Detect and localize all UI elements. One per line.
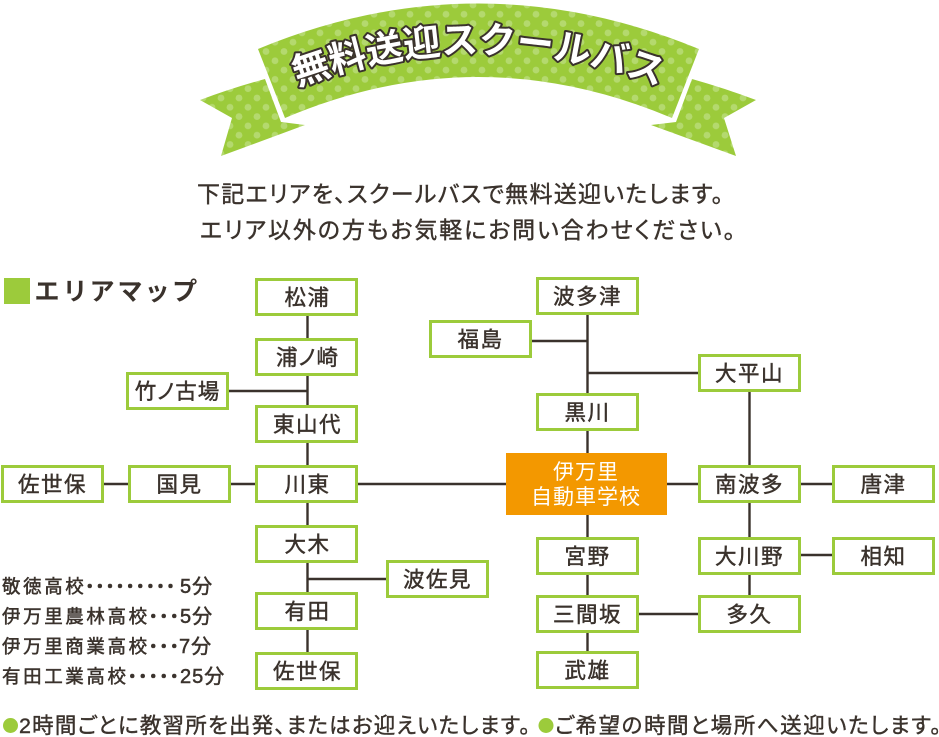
time: 有田工業高校: [2, 665, 225, 688]
station: 大川野: [700, 538, 800, 574]
station: 唐津: [834, 466, 934, 502]
time: 有田工業高校: 有田工業高校: [2, 666, 129, 687]
ribbon banner title: [200, 4, 756, 156]
station: 波多津: 波多津: [553, 285, 622, 309]
station: 武雄: 武雄: [564, 659, 611, 683]
driving school hub: 自動車学校: [531, 486, 641, 509]
time: 敬徳高校: 敬徳高校: [2, 576, 86, 597]
station: 多久: 多久: [726, 603, 773, 627]
ribbon right tail: [651, 79, 756, 156]
ribbon left tail: [200, 79, 305, 156]
station: 竹ノ古場: 竹ノ古場: [135, 380, 220, 404]
station: 相知: 相知: [860, 545, 907, 569]
station: 唐津: 唐津: [860, 473, 907, 497]
driving school hub: 伊万里: [553, 461, 619, 484]
station: 波多津: [538, 278, 638, 314]
intro text: 下記エリアを、スクールバスで無料送迎いたします。: [197, 181, 723, 207]
station: 武雄: [538, 652, 638, 688]
station: 東山代: [256, 406, 356, 442]
station: 川東: [256, 466, 356, 502]
time: 敬徳高校: [2, 575, 213, 598]
route connector lines: [104, 315, 832, 652]
bottom notes: [3, 714, 939, 737]
station: 三間坂: 三間坂: [553, 603, 622, 627]
time: 伊万里農林高校: 5分: [180, 605, 213, 628]
station: 松浦: [256, 280, 356, 314]
left route stations: [2, 280, 488, 688]
station: 宮野: 宮野: [564, 545, 611, 569]
station: 佐世保 south: [256, 654, 356, 688]
station: 有田: [256, 594, 356, 628]
station: 佐世保 west: [2, 466, 102, 502]
station: 波佐見: [388, 562, 488, 596]
station: 多久: [700, 596, 800, 632]
station: 国見: [130, 466, 230, 502]
station: 佐世保 west: 佐世保: [18, 473, 87, 497]
travel times to high schools: [2, 575, 225, 688]
banner heading: 無料送迎スクールバス: [289, 20, 664, 90]
station: 黒川: [538, 394, 638, 430]
section heading: area map: エリアマップ: [35, 278, 197, 306]
station: 相知: [834, 538, 934, 574]
station: 南波多: 南波多: [715, 473, 784, 497]
time: 伊万里商業高校: ・・・: [144, 636, 184, 657]
intro text: [197, 181, 735, 243]
station: 大木: 大木: [284, 533, 331, 557]
station: 国見: 国見: [156, 473, 203, 497]
ribbon main band: [258, 4, 699, 118]
time: 伊万里農林高校: 伊万里農林高校: [2, 606, 150, 627]
time: 有田工業高校: ・・・・・: [123, 666, 184, 687]
station: 川東: 川東: [284, 473, 331, 497]
station: 三間坂: [538, 596, 638, 632]
station: 浦ノ崎: [256, 340, 356, 374]
station: 有田: 有田: [284, 600, 331, 624]
station: 黒川: 黒川: [564, 401, 611, 425]
station: 福島: [430, 322, 530, 356]
station: 大木: [256, 526, 356, 562]
time: 敬徳高校: 5分: [180, 575, 213, 598]
station: 大平山: [700, 356, 800, 390]
time: 伊万里農林高校: [2, 605, 213, 628]
time: 有田工業高校: 25分: [180, 665, 225, 688]
intro text: エリア以外の方もお気軽にお問い合わせください。: [200, 217, 735, 243]
station: 竹ノ古場: [128, 374, 228, 408]
station: 佐世保 south: 佐世保: [273, 660, 342, 684]
station: 大平山: 大平山: [715, 362, 784, 386]
driving school hub: [506, 453, 667, 515]
time: 敬徳高校: ・・・・・・・・・: [80, 576, 180, 597]
station: 波佐見: 波佐見: [403, 568, 472, 592]
time: 伊万里農林高校: ・・・: [144, 606, 184, 627]
station: 福島: 福島: [457, 328, 504, 352]
time: 伊万里商業高校: 伊万里商業高校: [2, 636, 150, 657]
station: 宮野: [538, 538, 638, 574]
station: 松浦: 松浦: [284, 286, 331, 310]
station: 南波多: [700, 466, 800, 502]
station: 東山代: 東山代: [273, 413, 342, 437]
time: 伊万里商業高校: 7分: [179, 635, 212, 658]
right route stations: [430, 278, 934, 688]
station: 大川野: 大川野: [715, 545, 784, 569]
station: 浦ノ崎: 浦ノ崎: [276, 346, 339, 370]
time: 伊万里商業高校: [2, 635, 212, 658]
